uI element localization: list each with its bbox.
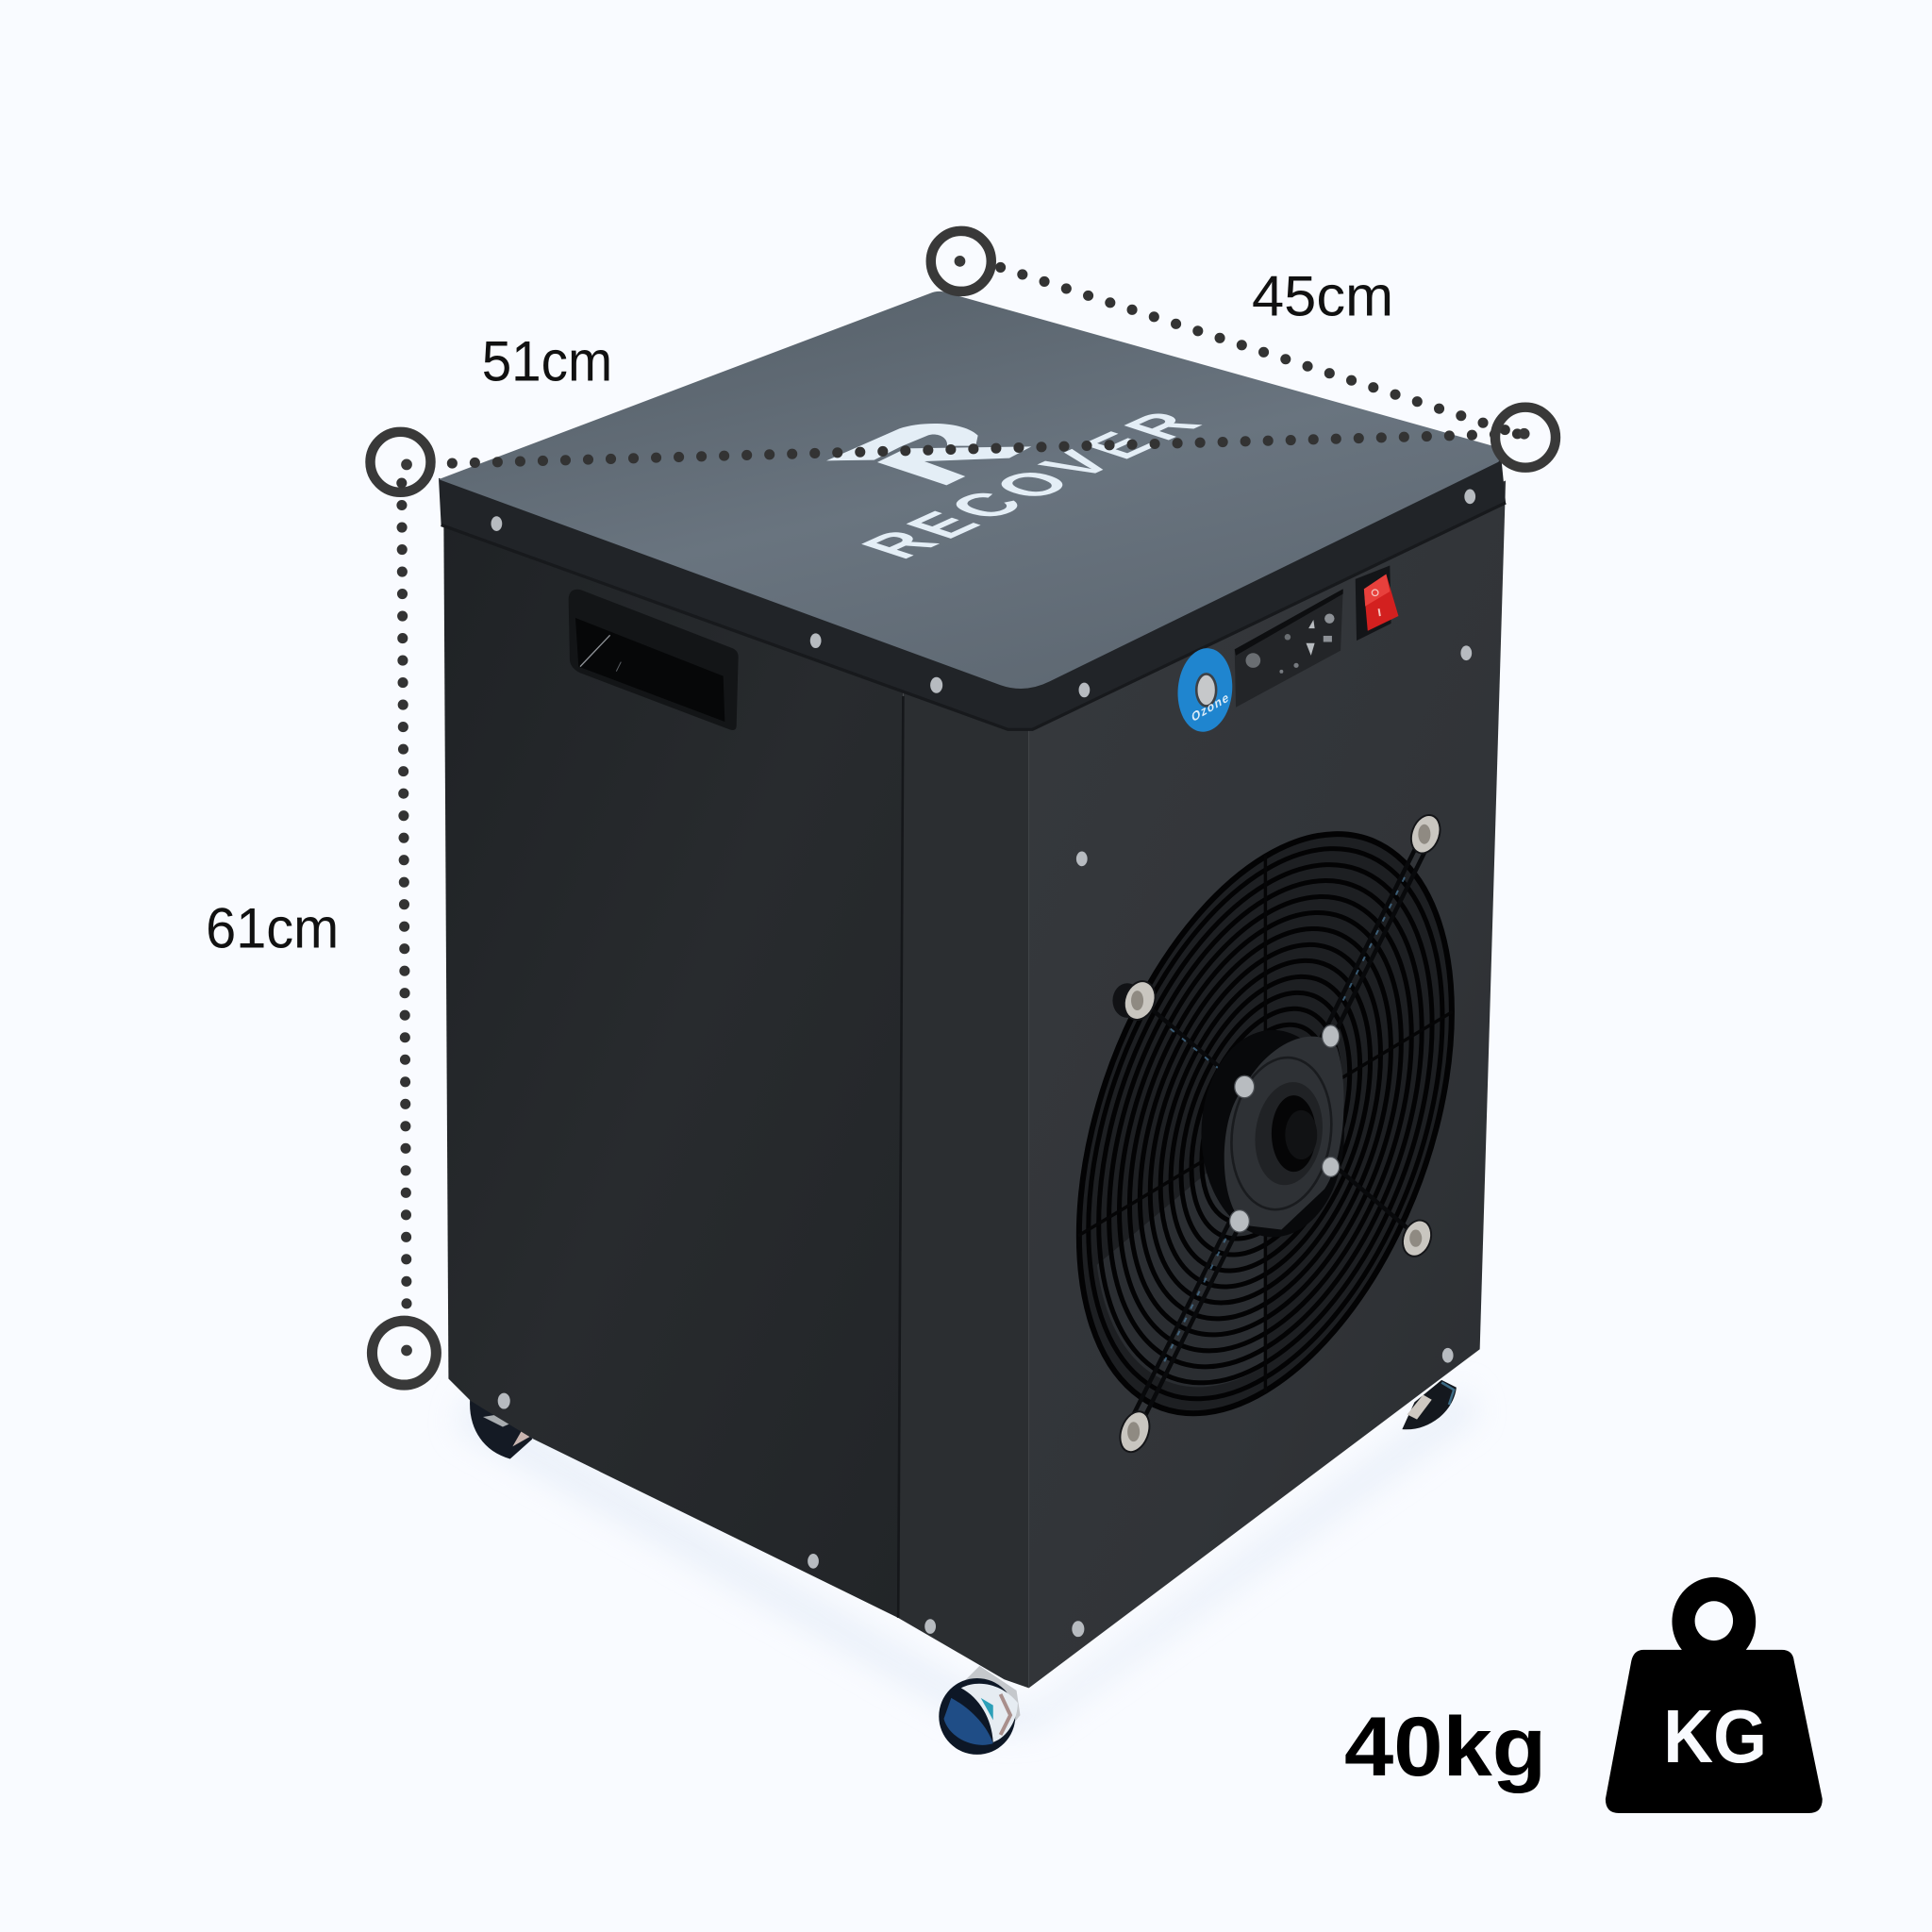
left face	[443, 499, 903, 1618]
ozone button label: Ozone	[1191, 689, 1230, 724]
lid band shadow line	[441, 503, 1506, 729]
power switch	[1356, 566, 1398, 641]
caster: front	[939, 1666, 1020, 1755]
fan rings	[1078, 743, 1453, 1505]
lid top face	[439, 291, 1501, 689]
caster: left	[470, 1392, 532, 1458]
panel seam	[898, 696, 903, 1618]
control display panel	[1235, 589, 1343, 708]
fan guard	[1078, 743, 1453, 1505]
floor shadow	[456, 1386, 1478, 1731]
label: 40kg: 40kg	[1344, 1700, 1546, 1793]
label: 61cm: 61cm	[206, 896, 339, 959]
ozone button label	[1174, 646, 1236, 734]
logo: RECOVER wordmark: RECOVER	[844, 403, 1224, 565]
logo: P arrow mark	[826, 424, 1031, 485]
label: 45cm: 45cm	[1252, 264, 1393, 327]
carry handle	[569, 590, 739, 730]
dimension line: height 61cm	[372, 483, 436, 1385]
guard cross wires	[1131, 841, 1429, 1424]
guard mounting bolts	[1112, 811, 1445, 1456]
product: chiller unit	[439, 291, 1506, 1755]
right face	[1029, 480, 1506, 1688]
dimension line: depth 45cm	[931, 231, 1556, 468]
corner panel	[898, 672, 1029, 1688]
icon: KG weight	[1606, 1577, 1823, 1813]
icon text: KG: KG	[1663, 1694, 1767, 1778]
label: 51cm: 51cm	[482, 330, 612, 393]
motor bolts	[1230, 1025, 1340, 1232]
cross wire glints	[1164, 877, 1405, 1361]
lid band	[439, 454, 1506, 729]
dimension line: width 51cm	[370, 432, 1522, 492]
screws	[491, 490, 1475, 1637]
motor hub	[1201, 1030, 1344, 1237]
caster: right	[1402, 1380, 1457, 1429]
